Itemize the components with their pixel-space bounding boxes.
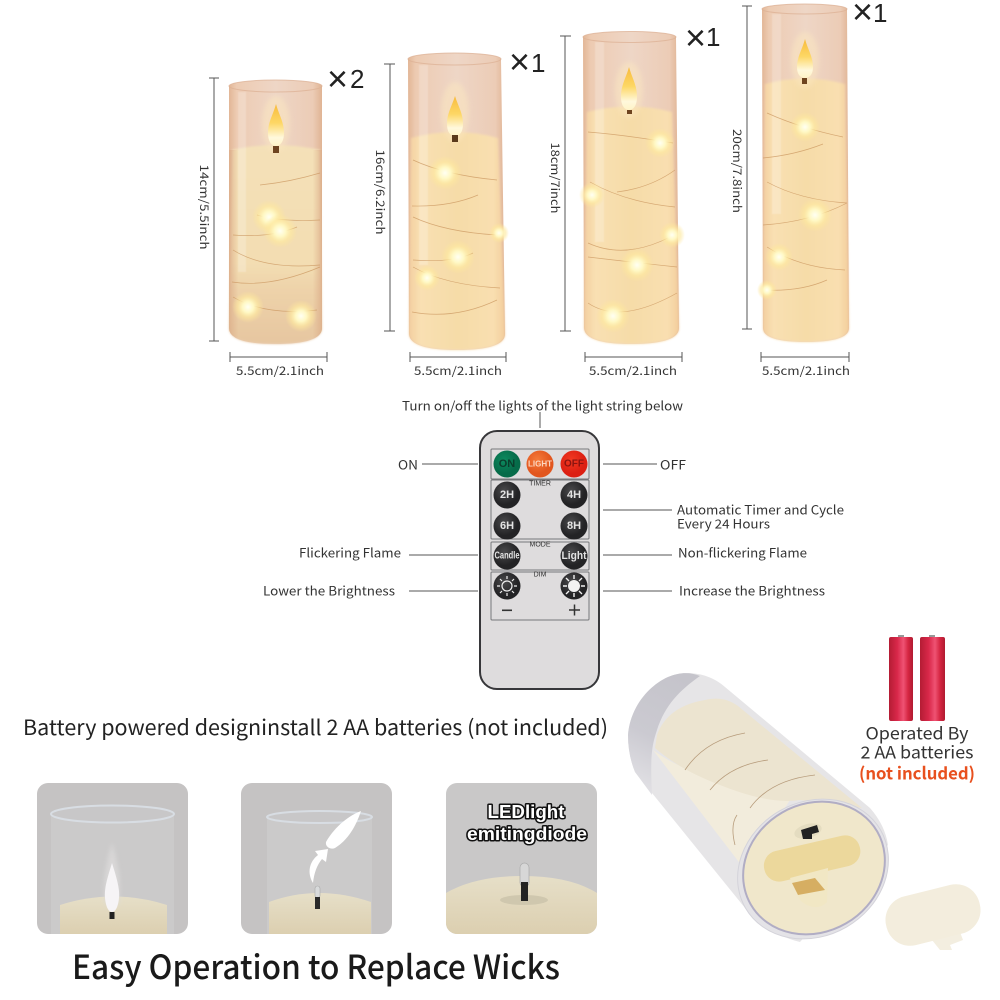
cover tab (932, 932, 963, 950)
cylinder body (628, 673, 888, 942)
photo 2 background (241, 783, 392, 934)
battery note heading: Battery powered designinstall 2 AA batteries (not included) (23, 712, 608, 742)
photo 3 caption (467, 802, 587, 844)
flame 4 (797, 39, 813, 78)
photo 1 background (37, 783, 188, 934)
photo 2 LED bulb (315, 886, 320, 898)
remote control (480, 431, 599, 689)
callout: lower brightness: Lower the Brightness (263, 580, 395, 600)
battery compartment (761, 832, 863, 885)
glass rim 4 (762, 4, 847, 14)
icon: removed flame (326, 811, 361, 849)
MODE heading: MODE (530, 542, 551, 548)
Light button: Light (562, 550, 587, 562)
width label candle 4: 5.5cm/2.1inch (762, 363, 850, 379)
photo 3 wick (521, 882, 528, 901)
photo 3 dimple (500, 895, 548, 905)
candle 3: 18cm, quantity 1 (579, 32, 685, 344)
Candle button: Candle (494, 550, 520, 562)
callout: timer (677, 500, 844, 532)
glass highlight 3 (595, 42, 604, 242)
OFF button (560, 450, 588, 478)
battery requirement text (859, 720, 975, 784)
height label 20cm: 20cm/7.8inch (729, 129, 745, 213)
photo: candle with flame (37, 783, 188, 934)
glass cylinder 4 (762, 4, 849, 342)
battery requirement text: Operated By (866, 720, 969, 744)
light string wires 4 (763, 113, 847, 290)
quantity x1 candle 2 (509, 41, 545, 82)
photo 1 rim (51, 806, 174, 822)
photo 2 rim (267, 811, 372, 823)
end cap rim (712, 772, 914, 966)
dimension lines for candles (209, 6, 849, 362)
contact (792, 878, 825, 895)
quantity x1 candle 2: × (509, 41, 530, 82)
glass highlight 4 (772, 14, 781, 214)
candle 1: 14cm, quantity 2 (229, 80, 322, 344)
8H button: 8H (567, 520, 581, 532)
photo 1 flame halo (105, 851, 119, 888)
compartment lower recess (790, 868, 828, 907)
Candle button (494, 542, 520, 570)
remote callout lines (409, 412, 672, 591)
wax body 4 (763, 78, 849, 342)
flame 1 (268, 104, 284, 146)
wick 3 (627, 110, 632, 114)
glass rim 2 (408, 53, 501, 65)
quantity x1 candle 3: × (685, 17, 706, 58)
callout: timer: Automatic Timer and Cycle (677, 500, 844, 518)
ON button: ON (499, 458, 515, 470)
photo 3 caption: emitingdiode (467, 824, 587, 844)
photo 2 wax (269, 893, 371, 934)
wick 4 (802, 78, 807, 84)
wick 1 (273, 146, 279, 153)
2H button: 2H (500, 489, 514, 501)
DIM heading: DIM (534, 572, 547, 578)
photo: LED diode (446, 783, 597, 934)
photo 1 glass interior (51, 814, 174, 934)
quantity x1 candle 4 (852, 0, 887, 32)
flame halo 1 (262, 96, 290, 152)
4H button (560, 482, 588, 508)
flame halo 2 (441, 82, 469, 142)
minus sign (502, 610, 512, 611)
photo 2 glass interior (267, 817, 372, 934)
glass cylinder 2 (408, 53, 505, 350)
LIGHT button (526, 450, 554, 478)
callout: increase brightness: Increase the Brightness (679, 580, 825, 600)
wires on tilted candle (685, 733, 815, 845)
photo 3 caption: LEDlight (488, 802, 564, 822)
switch (801, 825, 819, 839)
width label candle 1: 5.5cm/2.1inch (236, 363, 324, 379)
candle 4: 20cm, quantity 1 (757, 4, 849, 342)
light string wires 2 (412, 160, 500, 314)
plus sign (569, 604, 580, 616)
wax edge shading 1 (229, 150, 322, 344)
fairy lights 1 (232, 200, 317, 332)
OFF button: OFF (564, 458, 584, 470)
quantity x1 candle 2: 1 (531, 48, 545, 78)
height label 16cm: 16cm/6.2inch (372, 150, 388, 235)
4H button: 4H (567, 489, 581, 501)
glass rim 3 (583, 32, 676, 42)
cover plate (880, 879, 986, 951)
photo 1 wick (110, 912, 114, 919)
battery 1 (889, 635, 913, 721)
photo 2 wick (315, 897, 320, 909)
callout: timer: Every 24 Hours (677, 514, 770, 532)
lower wax (653, 750, 790, 870)
callout: string light: Turn on/off the lights of the light string below (402, 396, 683, 414)
flame 2 (447, 96, 463, 136)
glass highlight 1 (238, 92, 246, 272)
width label candle 3: 5.5cm/2.1inch (589, 363, 677, 379)
2H button (494, 482, 520, 508)
photo: removing flame (241, 783, 392, 934)
glass cylinder 3 (583, 32, 679, 344)
quantity x2 (327, 58, 364, 99)
light string wires 3 (588, 132, 677, 312)
button group outlines (491, 449, 589, 620)
battery 2 (920, 635, 945, 721)
fairy lights 4 (757, 112, 832, 300)
quantity x1 candle 3: 1 (706, 22, 720, 52)
battery requirement text: (not included) (859, 760, 975, 784)
LIGHT button: LIGHT (528, 460, 552, 468)
grey upper glass (628, 673, 700, 795)
flame 3 (621, 67, 637, 110)
tilted candle showing battery compartment (628, 673, 914, 966)
width label candle 2: 5.5cm/2.1inch (414, 363, 502, 379)
fairy lights 2 (414, 156, 509, 291)
icon: AA batteries (889, 635, 945, 721)
glass rim 1 (229, 80, 322, 92)
upper wax (655, 699, 862, 808)
end cap ring (719, 776, 909, 960)
height label 18cm: 18cm/7inch (547, 142, 563, 214)
ON button (494, 450, 520, 478)
callout: flickering flame: Flickering Flame (299, 542, 401, 562)
fairy lights 3 (579, 128, 685, 333)
Light button (560, 542, 588, 570)
glass highlight 2 (419, 65, 428, 265)
photo 3 wax (446, 876, 597, 934)
wax body 3 (584, 106, 679, 344)
callout: ON: ON (398, 454, 418, 474)
icon: bright sun (560, 572, 588, 600)
photo 1 white flame (105, 863, 119, 912)
flame halo 4 (791, 32, 819, 88)
8H button (560, 512, 588, 540)
wax body 1 (229, 145, 322, 344)
quantity x2: 2 (350, 64, 364, 94)
battery requirement text: 2 AA batteries (860, 738, 974, 764)
candle 2: 16cm, quantity 1 (408, 53, 509, 350)
photo 1 wax (60, 896, 167, 934)
6H button (494, 512, 520, 540)
glass cylinder 1 (229, 80, 322, 344)
height label 14cm: 14cm/5.5inch (196, 165, 212, 250)
remote body (480, 431, 599, 689)
callout: non-flickering flame: Non-flickering Flame (678, 542, 807, 562)
switch housing (793, 821, 823, 841)
quantity x2: × (327, 58, 348, 99)
photo 3 LED bulb (520, 863, 529, 887)
arrow: lift flame (310, 849, 328, 883)
flame halo 3 (615, 62, 643, 118)
wax body 2 (409, 132, 505, 350)
photo 3 background (446, 783, 597, 934)
quantity x1 candle 3 (685, 17, 720, 58)
battery cover (880, 879, 986, 951)
light string wires 1 (232, 173, 320, 311)
callout: OFF: OFF (660, 454, 686, 474)
icon: dim sun (494, 572, 520, 600)
wick 2 (452, 135, 458, 142)
TIMER heading: TIMER (529, 480, 551, 488)
6H button: 6H (500, 520, 514, 532)
heading: easy operation: Easy Operation to Replace Wicks (72, 941, 560, 989)
